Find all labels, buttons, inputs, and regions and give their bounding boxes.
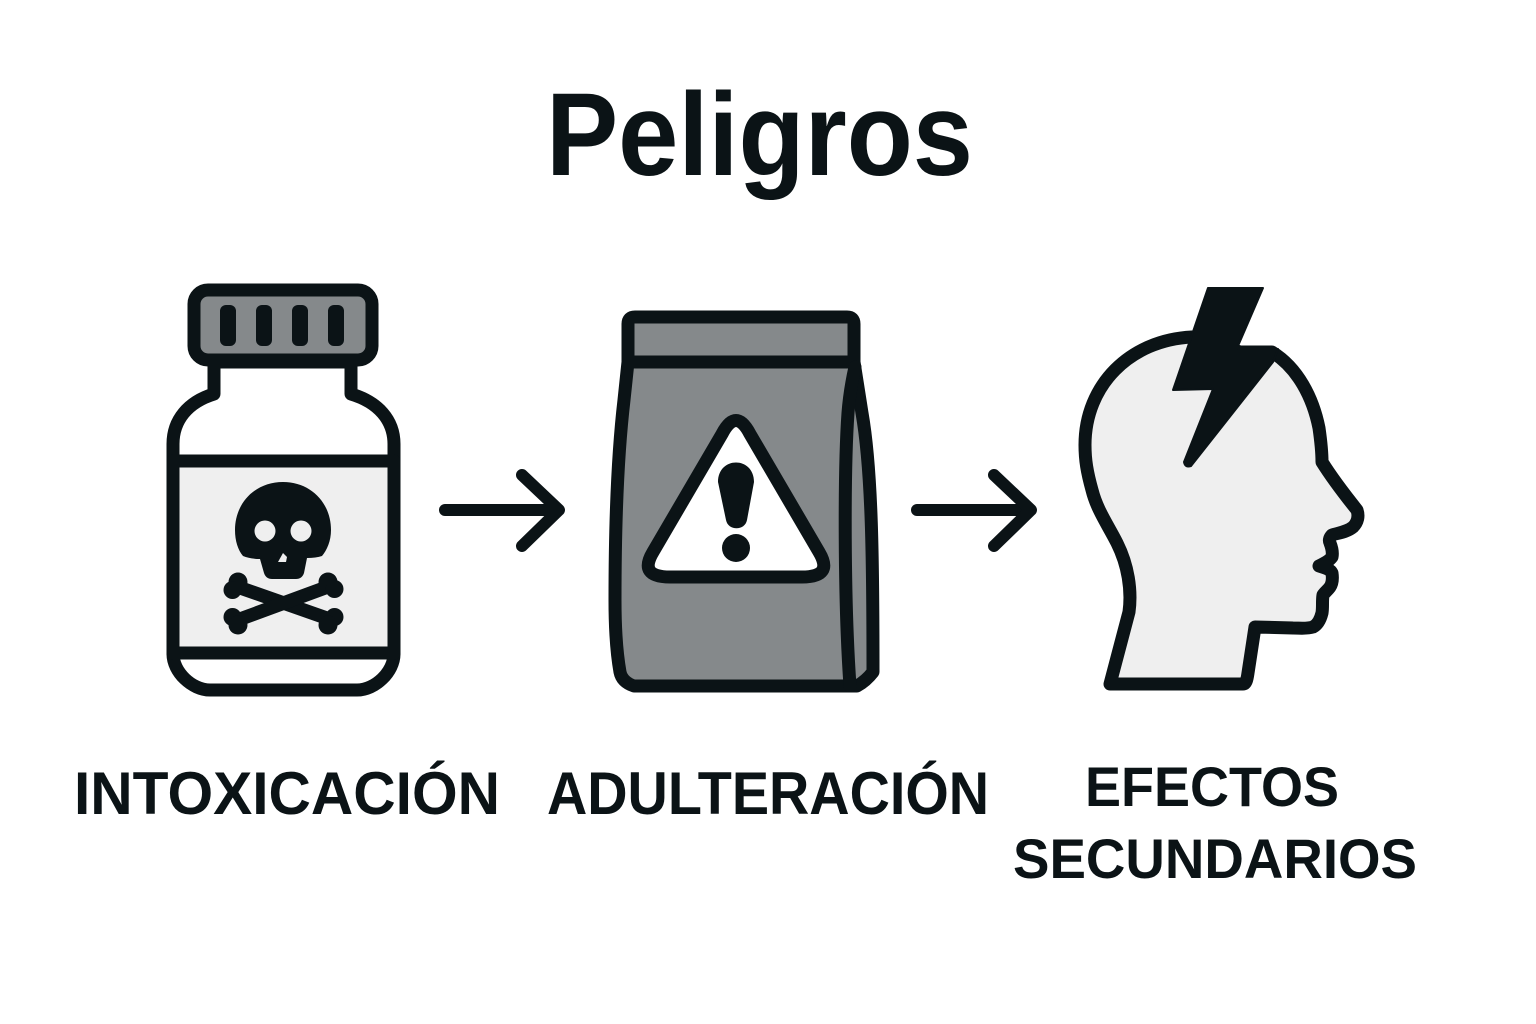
bag top band <box>628 317 854 362</box>
bag gusset <box>845 367 855 686</box>
cap ridges <box>220 305 344 346</box>
crossbones <box>235 586 332 621</box>
bottle label <box>173 461 394 653</box>
label: efectos secundarios: SECUNDARIOS <box>1013 827 1417 890</box>
bottle cap <box>194 290 372 360</box>
label: adulteración: ADULTERACIÓN <box>547 760 989 827</box>
lightning bolt <box>1173 288 1278 466</box>
skull <box>235 482 331 579</box>
icon: head with lightning <box>1085 288 1358 684</box>
bottle body <box>173 362 394 690</box>
exclamation mark <box>718 462 754 562</box>
label: efectos secundarios: EFECTOS <box>1085 755 1339 818</box>
label: efectos secundarios <box>1013 755 1417 890</box>
icon: poison bottle <box>173 290 394 690</box>
title: Peligros <box>546 69 973 201</box>
warning triangle <box>648 420 824 577</box>
head silhouette <box>1085 337 1358 684</box>
label: intoxicación: INTOXICACIÓN <box>74 760 500 827</box>
arrow 2 <box>917 475 1031 546</box>
bag body <box>615 362 873 686</box>
icon: bag with warning <box>615 317 873 686</box>
arrow 1 <box>445 475 559 546</box>
